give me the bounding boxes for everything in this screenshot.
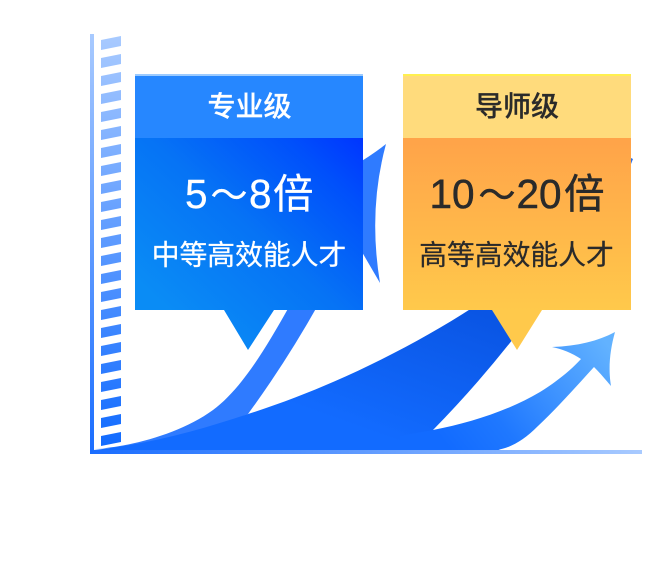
heading: mentor level: 导师级 [475, 91, 559, 122]
arrow tip sliver [631, 158, 633, 164]
multiplier: 10 to 20 times: 倍 [564, 171, 604, 217]
caption: mid-level talent: 中等高效能人才 [152, 240, 346, 270]
multiplier: 5 to 8 times: 8 [249, 171, 272, 217]
multiplier: 10 to 20 times: 10 [430, 171, 475, 217]
body: professional level [135, 138, 363, 350]
panel: professional level [135, 74, 363, 350]
multiplier: 5 to 8 times: 倍 [273, 171, 314, 217]
header: professional level [135, 74, 363, 138]
caption: high-level talent: 高等高效能人才 [419, 240, 614, 270]
curve: professional level arrow [94, 305, 318, 449]
multiplier: 10 to 20 times: 20 [516, 171, 562, 217]
arrowhead: professional level arrow [355, 144, 386, 283]
curve body [94, 308, 526, 450]
multiplier: 10 to 20 times: ～ [478, 175, 516, 216]
panel: mentor level [403, 74, 631, 350]
multiplier: 5 to 8 times: ～ [210, 175, 248, 216]
horizontal axis [90, 450, 642, 454]
vertical axis [90, 34, 94, 454]
heading: professional level: 专业级 [207, 91, 292, 122]
header: mentor level [403, 74, 631, 138]
arrowhead and tail [400, 332, 615, 450]
body: mentor level [403, 138, 631, 350]
curve: expert level arrow [94, 308, 615, 450]
ladder scale [101, 36, 121, 446]
multiplier: 5 to 8 times: 5 [185, 171, 208, 217]
